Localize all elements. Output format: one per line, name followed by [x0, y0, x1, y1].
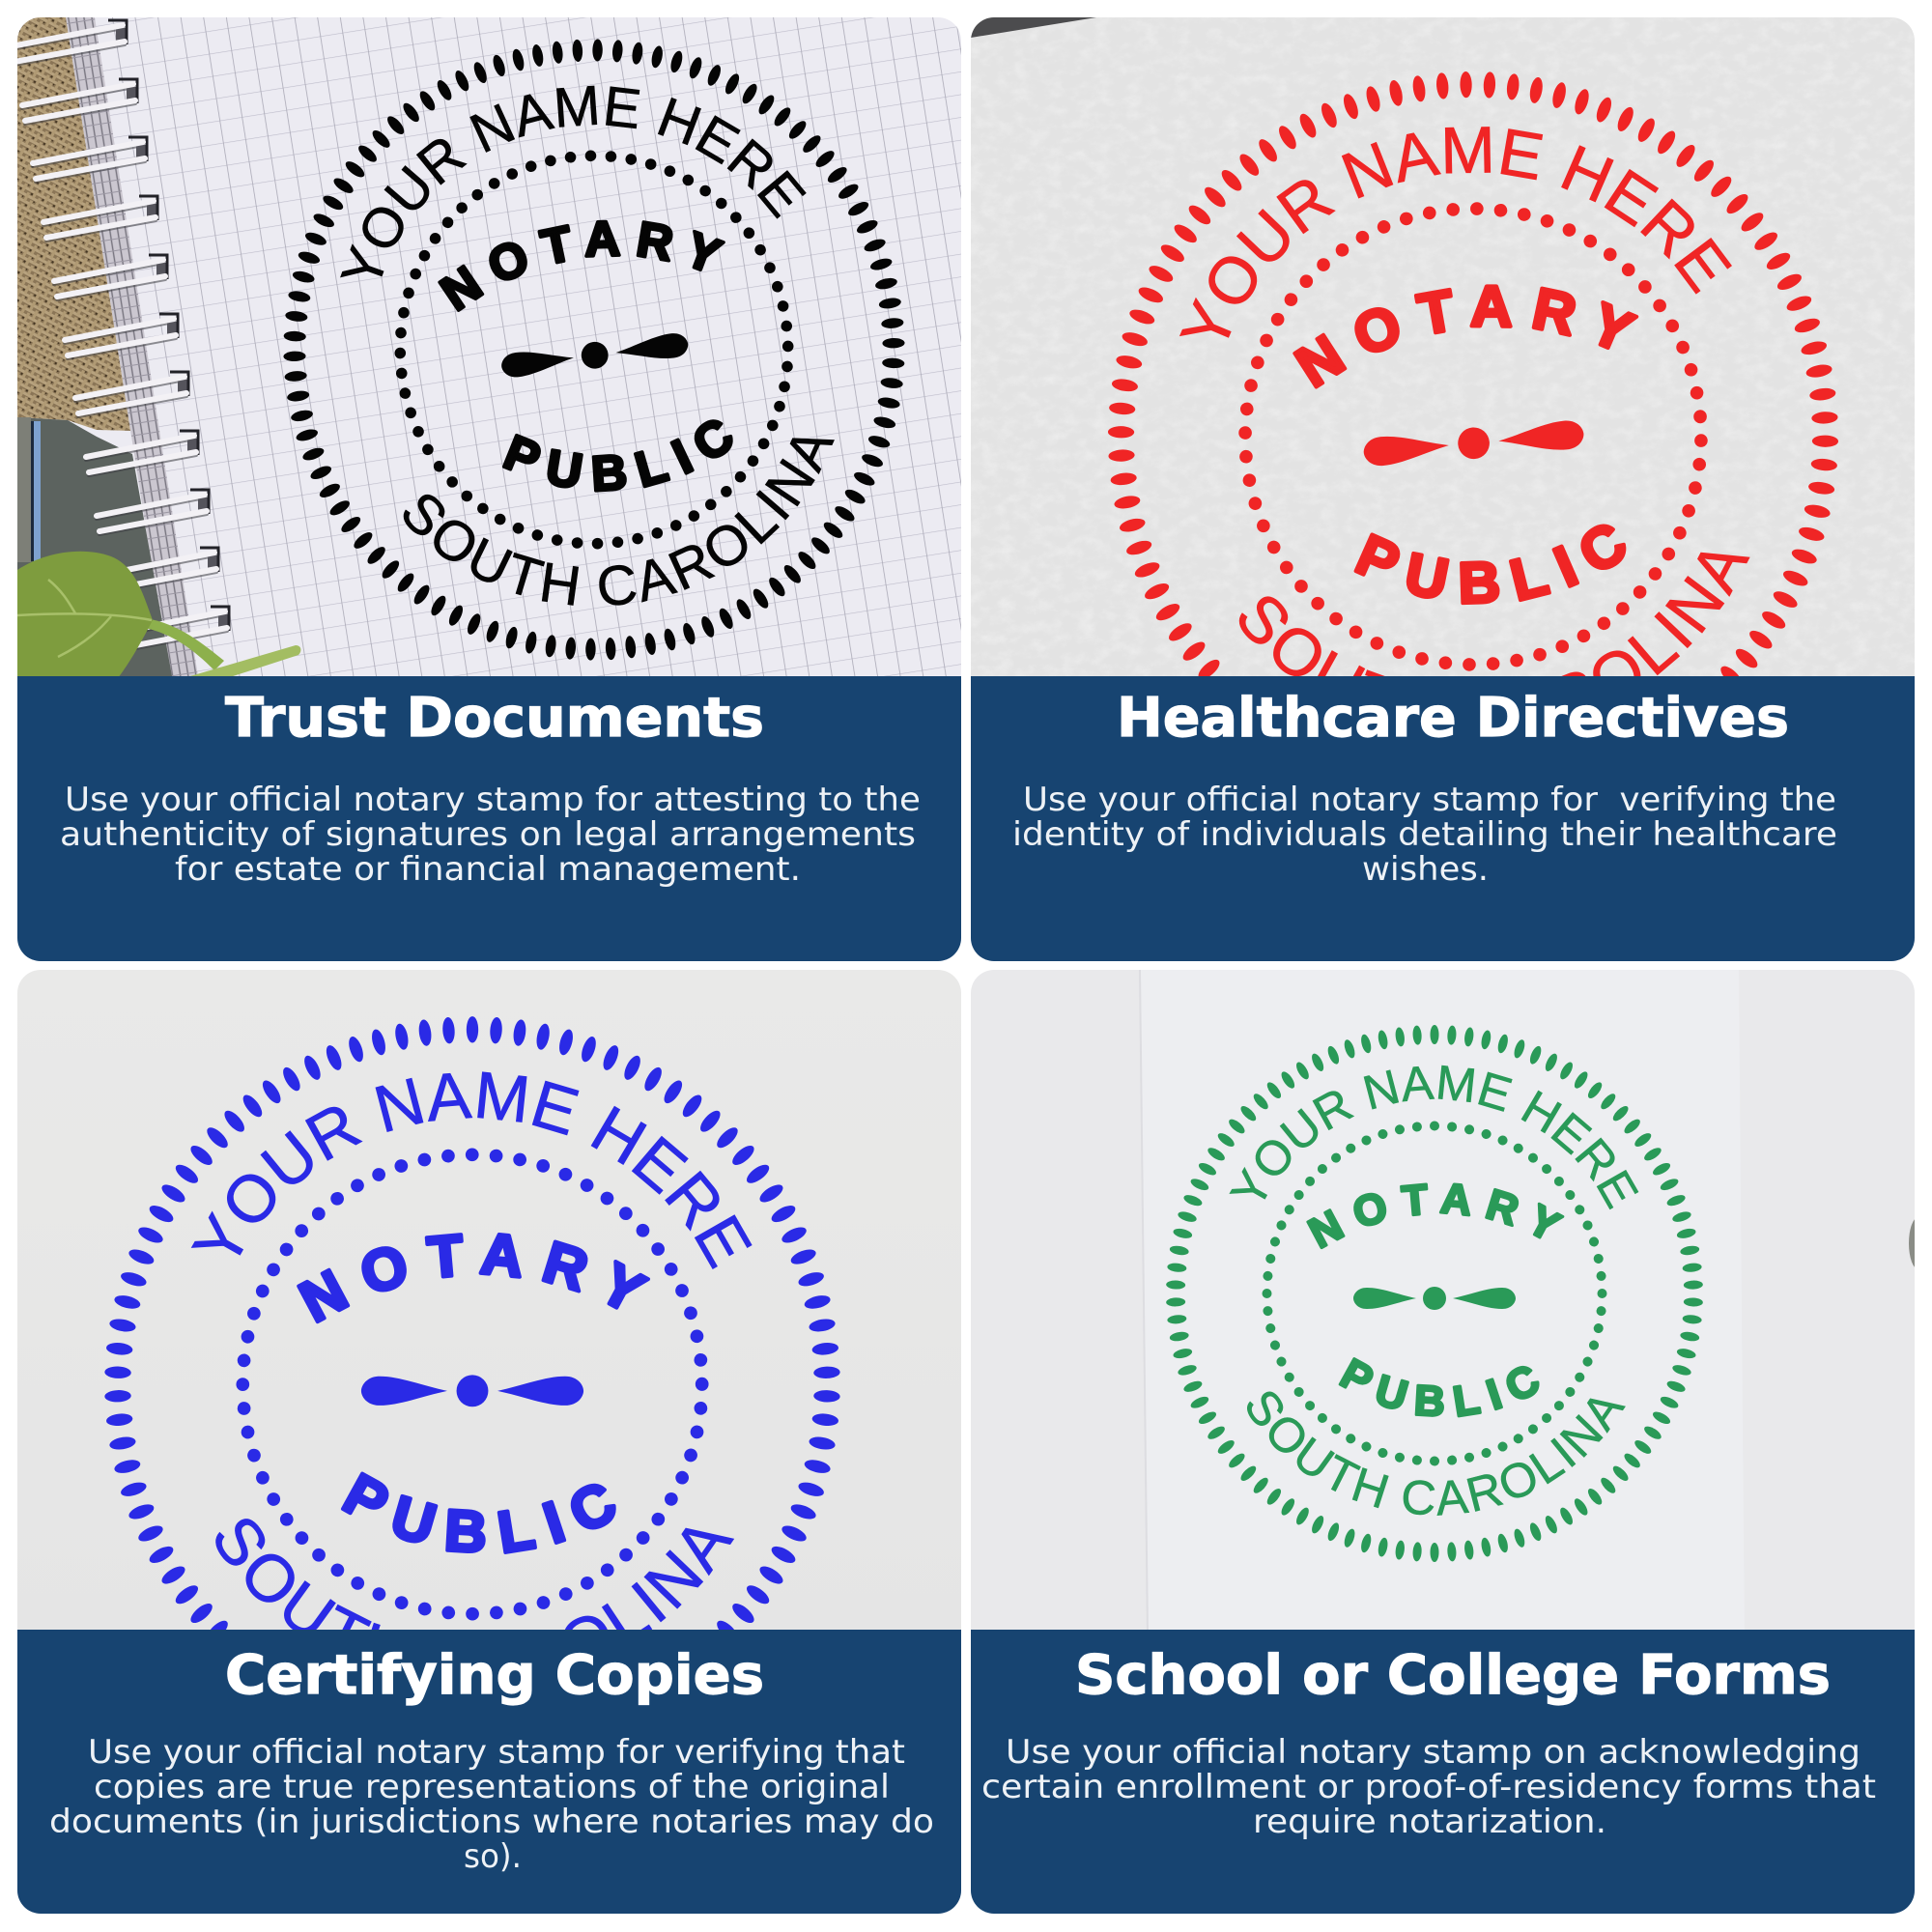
- text: trust documents description: Use your official notary stamp for attesting to the: [65, 781, 921, 819]
- caption band: [971, 1630, 1915, 1915]
- heading: trust documents: Trust Documents: [225, 687, 764, 750]
- inner dotted ring: [1226, 189, 1720, 684]
- photo: textured paper: [971, 17, 1915, 684]
- inner dotted ring: [242, 1154, 702, 1614]
- text: trust documents description: [60, 781, 921, 889]
- photo: white card on painted boards: [971, 970, 1928, 1636]
- text: your name here: YOUR NAME HERE: [191, 1071, 753, 1269]
- text: school or college forms description: [981, 1733, 1876, 1841]
- stamp: black notary seal: [283, 39, 905, 661]
- text: notary: NOTARY: [297, 1233, 651, 1323]
- panel: school or college forms: [971, 970, 1915, 1914]
- text: healthcare directives description: identity of individuals detailing their healthcare: [1012, 815, 1837, 854]
- caption band: [17, 1630, 961, 1915]
- propeller emblem: [361, 1375, 583, 1406]
- propeller emblem: [1364, 421, 1584, 466]
- outer dotted ring: [1166, 1025, 1703, 1562]
- text: certifying copies description: documents (in jurisdictions where notaries may do: [49, 1803, 934, 1841]
- text: certifying copies description: copies are true representations of the original: [94, 1768, 890, 1806]
- panel: certifying copies: [17, 970, 961, 1914]
- text: certifying copies description: Use your official notary stamp for verifying that: [88, 1733, 905, 1772]
- text: south carolina: SOUTH CAROLINA: [1247, 1391, 1626, 1516]
- text: public: PUBLIC: [502, 419, 733, 493]
- caption band: [971, 676, 1915, 961]
- text: south carolina: SOUTH CAROLINA: [404, 438, 835, 606]
- text: healthcare directives description: wishes.: [1362, 850, 1489, 889]
- stamp: red notary seal: [1108, 71, 1838, 676]
- outer dotted ring: [283, 39, 905, 661]
- propeller emblem: [501, 333, 688, 377]
- heading: school or college forms: School or College Forms: [1075, 1644, 1831, 1707]
- text: your name here: YOUR NAME HERE: [1229, 1065, 1638, 1209]
- text: trust documents description: for estate or financial management.: [175, 850, 801, 889]
- text: notary: NOTARY: [1306, 1182, 1565, 1250]
- heading: certifying copies: Certifying Copies: [225, 1644, 764, 1707]
- text: trust documents description: authenticity of signatures on legal arrangements: [60, 815, 916, 854]
- text: public: PUBLIC: [1354, 524, 1627, 605]
- text: healthcare directives description: Use your official notary stamp for verifying the: [1023, 781, 1836, 819]
- outer dotted ring: [104, 1016, 840, 1630]
- text: school or college forms description: certain enrollment or proof-of-residency forms that: [981, 1768, 1876, 1806]
- stamp: blue notary seal: [104, 1016, 840, 1630]
- inner dotted ring: [1267, 1126, 1602, 1461]
- text: certifying copies description: [49, 1733, 934, 1876]
- text: south carolina: SOUTH CAROLINA: [215, 1519, 734, 1630]
- photo: spiral notebook on burlap and wood: [12, 17, 961, 684]
- stamp: green notary seal: [1166, 1025, 1703, 1562]
- photo: plain paper: [17, 970, 961, 1636]
- outer dotted ring: [1108, 71, 1838, 676]
- text: school or college forms description: Use your official notary stamp on acknowledging: [1006, 1733, 1861, 1772]
- text: public: PUBLIC: [340, 1472, 616, 1554]
- caption band: [17, 676, 961, 961]
- text: certifying copies description: so).: [464, 1837, 522, 1876]
- text: your name here: YOUR NAME HERE: [340, 85, 807, 278]
- heading: healthcare directives: Healthcare Directives: [1117, 687, 1789, 750]
- text: healthcare directives description: [1015, 785, 1835, 881]
- text: notary: NOTARY: [1293, 284, 1638, 389]
- text: your name here: YOUR NAME HERE: [1179, 127, 1732, 338]
- text: notary: NOTARY: [438, 220, 725, 312]
- propeller emblem: [1353, 1287, 1516, 1310]
- inner dotted ring: [394, 151, 794, 549]
- panel: healthcare directives: [971, 17, 1915, 961]
- panel: trust documents: [17, 17, 961, 961]
- text: school or college forms description: require notarization.: [1253, 1803, 1606, 1841]
- text: public: PUBLIC: [1339, 1357, 1540, 1418]
- text: south carolina: SOUTH CAROLINA: [1238, 553, 1750, 676]
